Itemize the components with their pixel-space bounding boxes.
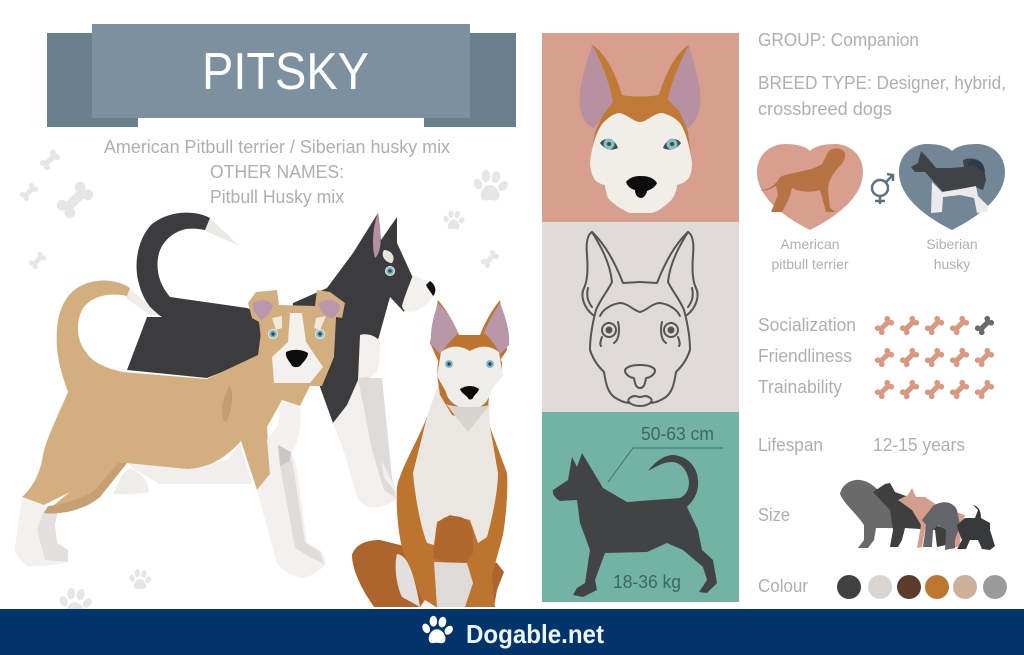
chest (413, 385, 498, 545)
dog silhouette (553, 453, 717, 597)
subtitle text block: American Pitbull terrier / Siberian husky mix (104, 137, 450, 157)
title banner (47, 24, 516, 128)
ratings labels: Trainability (758, 377, 842, 397)
lifespan: 12-15 years (873, 435, 965, 455)
ratings labels: Friendliness (758, 346, 852, 366)
heart: American pitbull terrier (757, 144, 863, 230)
ears (580, 45, 622, 128)
colour swatches (837, 575, 1007, 599)
head (248, 290, 345, 386)
illustration: sitting orange dog (352, 300, 509, 607)
decorative bones and paws (20, 150, 510, 617)
husky rear front leg (360, 378, 398, 500)
front leg white (257, 403, 325, 578)
far hind leg (113, 468, 149, 494)
eyes (600, 138, 618, 150)
body (397, 400, 507, 607)
face (590, 113, 692, 213)
panel: line-art face (542, 222, 739, 412)
lifespan (758, 435, 965, 455)
illustration: black husky dog (127, 213, 435, 507)
colour label: Colour (758, 576, 808, 596)
size label: Size (758, 505, 790, 525)
footer bar (0, 609, 1024, 655)
size dog silhouettes (840, 480, 995, 550)
footer brand: Dogable.net (466, 619, 604, 649)
weight label: 18-36 kg (613, 572, 681, 592)
illustration: tan dog (15, 281, 345, 578)
height label: 50-63 cm (641, 424, 714, 444)
breed type text: crossbreed dogs (758, 99, 892, 119)
head (437, 337, 502, 420)
hind paw (15, 498, 68, 566)
group text: GROUP: Companion (758, 30, 919, 50)
ratings labels (758, 315, 856, 397)
ears (430, 300, 507, 365)
tail tip (126, 287, 160, 316)
husky front leg (333, 334, 397, 507)
icon: paw logo (421, 616, 455, 643)
heart: Siberian husky (899, 144, 1005, 230)
ratings bones (875, 316, 994, 399)
panel: colour face (542, 33, 739, 222)
breed labels: husky (934, 256, 970, 272)
breed labels: Siberian (926, 236, 978, 252)
ear edges and crown (590, 45, 692, 162)
breed type text: BREED TYPE: Designer, hybrid, (758, 73, 1006, 93)
breed labels: pitbull terrier (771, 256, 849, 272)
ratings labels: Socialization (758, 315, 856, 335)
subtitle text block: OTHER NAMES: (210, 162, 344, 182)
panel: silhouette measurements (542, 412, 739, 602)
breed labels (771, 236, 978, 272)
nose (626, 176, 657, 198)
icon: male-female symbol (872, 174, 893, 204)
breed type text (758, 73, 1006, 119)
title: PITSKY (202, 43, 369, 101)
tan body and tail (22, 281, 320, 513)
subtitle text block (104, 137, 450, 207)
haunch (352, 540, 435, 607)
breed labels: American (780, 236, 840, 252)
paws (396, 554, 420, 607)
lifespan: Lifespan (758, 435, 823, 455)
height line (608, 448, 723, 482)
subtitle text block: Pitbull Husky mix (210, 187, 344, 207)
